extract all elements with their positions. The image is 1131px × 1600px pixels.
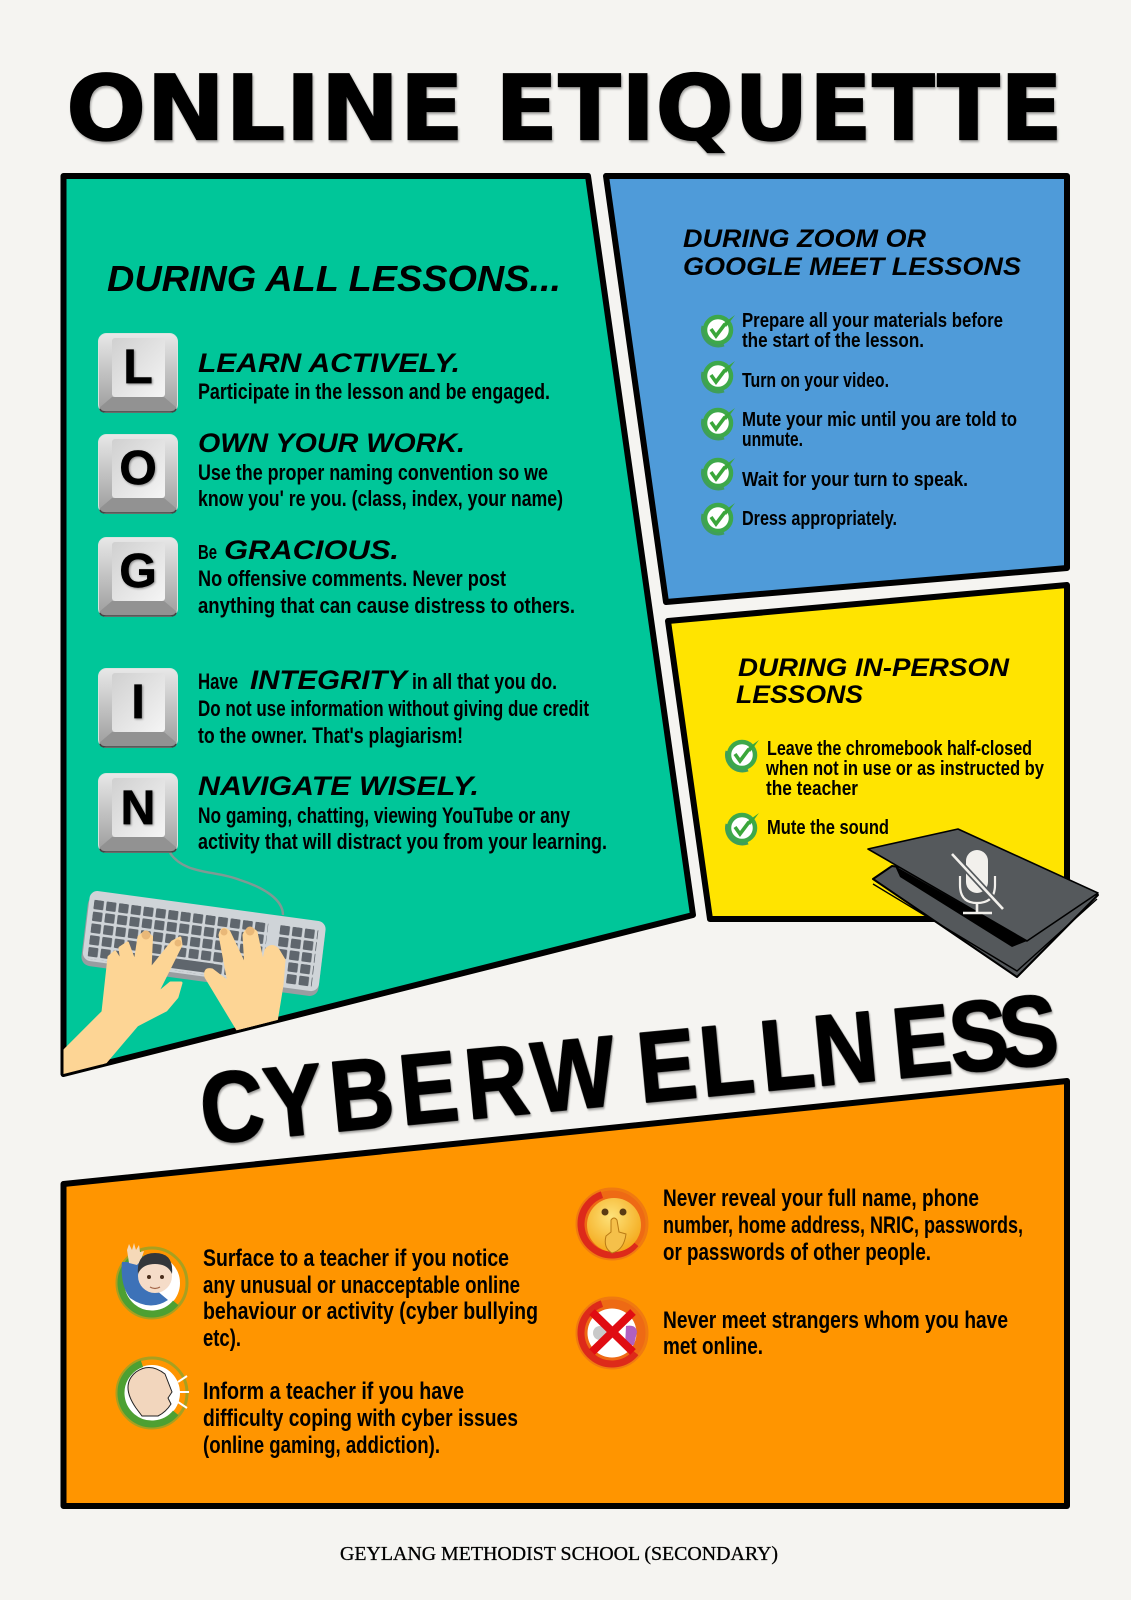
item: be gracious xyxy=(198,535,575,618)
item: own your work: Use the proper naming convention so we xyxy=(198,460,548,485)
item: be gracious: No offensive comments. Never post xyxy=(198,566,507,591)
key L xyxy=(98,334,178,412)
key L: L xyxy=(123,341,153,394)
item: be gracious: anything that can cause distress to others. xyxy=(198,593,575,618)
text: surface to a teacher: Surface to a teacher if you notice xyxy=(203,1245,509,1272)
text: never reveal xyxy=(663,1185,1023,1266)
checklist item: leave chromebook half-closed: Leave the chromebook half-closed xyxy=(767,738,1032,760)
item: own your work: OWN YOUR WORK. xyxy=(198,428,465,458)
checklist item: turn on video: Turn on your video. xyxy=(742,370,889,392)
yellow panel background xyxy=(668,585,1067,919)
blue panel background xyxy=(606,176,1067,602)
item: learn actively xyxy=(198,348,550,404)
item: have integrity: in all that you do. xyxy=(412,669,557,694)
checklist item: leave chromebook half-closed xyxy=(726,738,1045,800)
text: inform a teacher: difficulty coping with cyber issues xyxy=(203,1405,518,1432)
key N: N xyxy=(121,782,155,835)
key I xyxy=(98,668,178,748)
text: never meet strangers: met online. xyxy=(663,1333,763,1360)
item: be gracious: Be xyxy=(198,542,217,564)
checklist item: mute the sound: Mute the sound xyxy=(767,817,889,839)
panel: during in-person lessons xyxy=(668,585,1067,919)
text: surface to a teacher: etc). xyxy=(203,1325,241,1352)
icon: keyboard and typing hands xyxy=(60,890,326,1090)
item: own your work: know you' re you. (class, index, your name) xyxy=(198,486,563,511)
checklist item: mute mic: Mute your mic until you are told to xyxy=(742,409,1017,431)
key O: O xyxy=(119,442,157,495)
icon: person raising hand xyxy=(108,1239,196,1327)
footer: school name: GEYLANG METHODIST SCHOOL (SECONDARY) xyxy=(340,1543,778,1565)
heading: during in-person lessons: DURING IN-PERSON xyxy=(738,654,1010,682)
checklist item: prepare materials xyxy=(702,310,1003,352)
text: never reveal: Never reveal your full name, phone xyxy=(663,1185,979,1212)
key I: I xyxy=(131,676,145,729)
item: navigate wisely: No gaming, chatting, viewing YouTube or any xyxy=(198,803,571,828)
orange panel background xyxy=(64,1081,1067,1506)
icon: person speaking xyxy=(108,1349,196,1437)
item: have integrity: Do not use information without giving due credit xyxy=(198,696,590,721)
title: online etiquette xyxy=(66,56,1063,162)
checklist item: wait for turn xyxy=(702,458,968,491)
key G: G xyxy=(119,545,157,598)
item: learn actively: Participate in the lesson and be engaged. xyxy=(198,379,550,404)
heading: during in-person lessons xyxy=(736,654,1010,709)
item: be gracious: GRACIOUS. xyxy=(224,535,399,565)
key G xyxy=(98,538,178,616)
heading: cyberwellness: CYBERWELLNESS xyxy=(195,973,1063,1165)
panel: during all lessons xyxy=(60,176,693,1090)
title: online etiquette: ONLINE xyxy=(66,56,464,162)
item: learn actively: LEARN ACTIVELY. xyxy=(198,348,460,378)
text: inform a teacher: Inform a teacher if you have xyxy=(203,1378,464,1405)
checklist item: leave chromebook half-closed: when not in use or as instructed by xyxy=(765,758,1045,780)
heading: during zoom or google meet lessons: DURING ZOOM OR xyxy=(683,225,926,253)
heading: during zoom or google meet lessons: GOOGLE MEET LESSONS xyxy=(683,253,1021,281)
green panel background xyxy=(64,176,693,1074)
checklist item: mute the sound xyxy=(726,813,889,844)
item: navigate wisely xyxy=(198,771,607,854)
text: never meet strangers: Never meet strangers whom you have xyxy=(663,1307,1008,1334)
checklist item: turn on video xyxy=(702,361,889,392)
checklist item: dress appropriately xyxy=(702,503,897,534)
title: online etiquette: ETIQUETTE xyxy=(495,56,1063,162)
text: surface to a teacher: behaviour or activity (cyber bullying xyxy=(203,1298,538,1325)
checklist item: prepare materials: the start of the lesson. xyxy=(742,330,924,352)
checklist item: wait for turn: Wait for your turn to speak. xyxy=(742,469,968,491)
text: surface to a teacher xyxy=(203,1245,538,1352)
key O xyxy=(98,434,178,514)
checklist item: mute mic: unmute. xyxy=(742,429,803,451)
panel: during zoom or google meet lessons xyxy=(606,176,1067,602)
icon: half-closed chromebook with muted mic xyxy=(868,829,1098,977)
item: navigate wisely: activity that will distract you from your learning. xyxy=(198,829,607,854)
checklist item: prepare materials: Prepare all your materials before xyxy=(742,310,1003,332)
checklist item: dress appropriately: Dress appropriately. xyxy=(742,508,897,530)
item: have integrity xyxy=(198,665,590,748)
heading: during zoom or google meet lessons xyxy=(683,225,1021,281)
text: never meet strangers xyxy=(663,1307,1008,1360)
key N xyxy=(98,774,178,852)
text: never reveal: number, home address, NRIC, passwords, xyxy=(663,1212,1023,1239)
item: own your work xyxy=(198,428,563,511)
heading: during in-person lessons: LESSONS xyxy=(736,681,863,709)
icon: shushing face xyxy=(568,1180,656,1268)
text: inform a teacher xyxy=(203,1378,518,1459)
item: navigate wisely: NAVIGATE WISELY. xyxy=(198,771,479,801)
text: surface to a teacher: any unusual or unacceptable online xyxy=(203,1272,520,1299)
icon: do not meet strangers xyxy=(568,1289,656,1377)
text: never reveal: or passwords of other people. xyxy=(663,1239,931,1266)
item: have integrity: to the owner. That's plagiarism! xyxy=(198,723,463,748)
checklist item: mute mic xyxy=(702,408,1017,451)
checklist item: leave chromebook half-closed: the teacher xyxy=(766,778,858,800)
icon: keyboard cable xyxy=(170,853,283,915)
item: have integrity: Have xyxy=(198,669,238,694)
text: inform a teacher: (online gaming, addiction). xyxy=(203,1432,440,1459)
heading: during all lessons: DURING ALL LESSONS... xyxy=(107,258,561,299)
item: have integrity: INTEGRITY xyxy=(250,665,410,695)
panel: cyberwellness xyxy=(64,1081,1067,1506)
